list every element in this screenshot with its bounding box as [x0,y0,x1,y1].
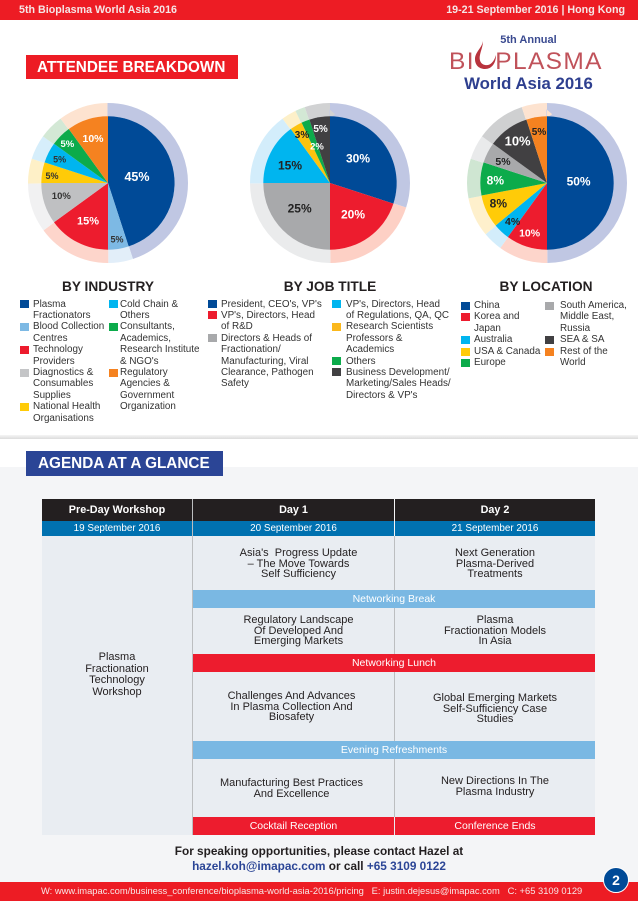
legend: by job title: Manufacturing, Viral [221,356,309,367]
date: 20 september [193,521,394,536]
pie chart: by job title: 25% [287,202,312,216]
legend: by location [461,300,627,368]
header: day 1: Day 1 [279,504,308,516]
pie chart: by job title: 15% [278,159,302,173]
footer bar [0,882,638,901]
heading: attendee breakdown: ATTENDEE BREAKDOWN [37,59,225,76]
legend: by industry [20,298,199,424]
pie chart: by industry: 45% [124,170,149,184]
heading: agenda at a glance [26,451,223,476]
day 2 session 2: Fractionation Models [444,625,546,637]
legend: by industry: Diagnostics & [33,367,93,378]
day 2 session 4: New Directions In The [441,775,549,787]
legend: by job title: VP's, Directors, Head [346,298,440,310]
date: 21 september [395,521,595,536]
table body background [42,536,595,835]
day 2 session 4 [441,775,549,798]
legend: by location: Japan [474,323,501,334]
legend: by location: Middle East, [560,311,614,322]
day 2 session 1 [455,547,535,580]
workshop cell: Plasma [99,651,135,663]
legend: by industry: Blood Collection [33,321,104,332]
day 1 session 1: – The Move Towards [248,558,349,570]
day 1 session 3: In Plasma Collection And [230,701,353,713]
header right text: 19-21 September 2016 | Hong Kong [446,4,625,16]
legend: by job title [208,298,451,401]
pie chart: by job title: 30% [346,152,370,166]
pie chart: by job title [250,103,410,263]
legend: by industry: Organisations [33,413,94,424]
networking break: Networking Break [353,593,435,605]
day 2 session 2: Plasma [477,614,513,626]
logo: bioplasma wordmark: BIOPLASMA [449,48,603,75]
pie chart: by location: 8% [486,174,504,188]
date: 21 september: 21 September 2016 [452,523,538,534]
legend: by industry: Research Institute [120,344,199,355]
pie chart: by location: 10% [519,228,540,240]
legend: by industry: & NGO's [120,356,159,367]
legend: by location: USA & Canada [474,346,540,357]
legend: by location: Korea and [474,311,520,322]
legend: by industry: Fractionators [33,310,91,321]
column line [394,536,395,817]
legend: by job title: VP's, Directors, Head [221,310,315,321]
agenda background panel [0,467,638,883]
workshop cell: Fractionation [85,663,149,675]
contact text: For speaking opportunities, please contact Hazel at [175,844,463,858]
legend: by job title: President, CEO's, VP's [221,298,322,310]
logo: 5th annual: 5th Annual [500,34,557,46]
legend: by job title: Safety [221,378,249,389]
workshop cell: Technology [89,674,145,686]
pie chart: by location: 5% [495,156,511,168]
header: pre-day workshop [42,499,192,521]
pie chart: by job title: 3% [294,130,309,141]
day 2 session 3: Studies [477,713,513,725]
pie chart: by industry: 5% [110,235,123,245]
day 2 session 1: Plasma-Derived [456,558,534,570]
evening refreshments [193,741,595,759]
day 2 session 1: Next Generation [455,547,535,559]
networking lunch: Networking Lunch [352,657,436,669]
conference ends [395,817,595,835]
legend: by industry: Organization [120,401,176,412]
legend: by industry: Consultants, [120,321,175,332]
logo [449,34,603,93]
legend: by job title: Professors & [346,333,402,344]
pie chart: by job title: 5% [313,124,328,135]
header bar [0,0,638,20]
legend: by job title: Research Scientists [346,321,433,332]
heading: attendee breakdown [26,55,238,79]
workshop cell [85,651,149,698]
date: 20 september: 20 September 2016 [250,523,337,534]
contact text: hazel.koh@imapac.com or call +65 3109 0122 [192,859,446,873]
logo: drop icon [475,41,496,69]
day 1 session 4 [220,777,363,800]
header: pre-day workshop: Pre-Day Workshop [69,504,165,516]
pie chart: by location: 50% [566,175,591,189]
day 1 session 2 [243,614,354,647]
day 2 session 2: In Asia [478,635,512,647]
date: 19 september [42,521,192,536]
legend: by location: South America, [560,300,627,311]
legend: by job title: Others [346,356,376,367]
pie chart: by job title: 20% [341,208,365,222]
networking break [193,590,595,608]
section divider [0,435,638,439]
day 2 session 4: Plasma Industry [456,786,534,798]
day 1 session 3 [228,690,355,723]
chart title: by industry: BY INDUSTRY [62,279,154,294]
legend: by location: Europe [474,357,506,368]
footer text: W: www.imapac.com/business_conference/bioplasma-world-asia-2016/pricing E: justin.dejesus@imapac.com C: +65 3109 0129 [41,886,582,896]
day 1 session 1: Asia's Progress Update [240,547,357,559]
networking lunch [193,654,595,672]
pie chart: by industry: 5% [53,155,66,165]
workshop cell: Workshop [92,686,142,698]
legend: by industry: Centres [33,333,68,344]
day 1 session 2: Emerging Markets [254,635,343,647]
legend: by industry: Academics, [120,333,171,344]
cocktail reception [193,817,394,835]
legend: by industry: Others [120,310,150,321]
header: day 2: Day 2 [481,504,509,516]
legend: by job title: of Regulations, QA, QC [346,310,449,321]
legend: by industry: Regulatory [120,367,168,378]
legend: by location: China [474,300,500,311]
legend: by location: Australia [474,334,512,345]
day 2 session 3 [433,692,557,725]
legend: by job title: Business Development/ [346,367,450,378]
pie chart: by job title: 2% [310,142,324,153]
contact text [175,844,464,873]
legend: by industry: Cold Chain & [120,298,178,310]
legend: by industry: Consumables [33,378,93,389]
legend: by location: Russia [560,323,590,334]
page number badge: 2 [612,872,620,888]
pie chart: by industry [28,103,188,263]
day 1 session 1 [240,547,357,580]
legend: by job title: Directors & Heads of [221,333,312,344]
header: day 1 [193,499,394,521]
day 2 session 1: Treatments [467,568,523,580]
day 1 session 2: Of Developed And [254,625,343,637]
legend: by job title: Fractionation/ [221,344,281,355]
evening refreshments: Evening Refreshments [341,744,447,756]
pie chart: by location: 5% [531,127,546,138]
legend: by industry: Supplies [33,390,71,401]
legend: by job title: of R&D [221,321,253,332]
legend: by location: SEA & SA [560,334,604,345]
header: day 2 [395,499,595,521]
day 2 session 3: Global Emerging Markets [433,692,557,704]
day 2 session 3: Self-Sufficiency Case [443,703,547,715]
legend: by job title: Marketing/Sales Heads/ [346,378,451,389]
pie chart: by location: 10% [504,134,531,149]
day 1 session 4: Manufacturing Best Practices [220,777,363,789]
conference ends: Conference Ends [454,820,536,832]
heading: agenda at a glance: AGENDA AT A GLANCE [38,455,210,472]
pie chart: by industry: 10% [82,133,104,145]
day 2 session 2 [444,614,546,647]
pie chart: by industry: 10% [51,191,71,202]
legend: by industry: Providers [33,356,75,367]
legend: by location: World [560,357,586,368]
legend: by industry: Agencies & [120,378,170,389]
day 1 session 3: Biosafety [269,711,314,723]
chart title: by location: BY LOCATION [499,279,593,294]
date: 19 september: 19 September 2016 [74,523,160,534]
legend: by industry: Technology [33,344,83,355]
pie chart: by location: 4% [505,216,521,228]
legend: by location: Rest of the [560,346,608,357]
day 1 session 3: Challenges And Advances [228,690,355,702]
chart title: by job title: BY JOB TITLE [284,279,376,294]
pie chart: by industry: 15% [77,216,99,228]
cocktail reception: Cocktail Reception [250,820,337,832]
legend: by job title: Clearance, Pathogen [221,367,314,378]
logo: world asia 2016: World Asia 2016 [464,74,593,93]
pie chart: by location: 8% [489,197,507,211]
column line [192,499,193,835]
legend: by industry: Government [120,390,174,401]
legend: by industry: National Health [33,401,100,412]
pie chart: by industry: 5% [60,139,74,150]
header left text: 5th Bioplasma World Asia 2016 [19,4,177,16]
day 1 session 4: And Excellence [254,788,329,800]
legend: by job title: Directors & VP's [346,390,417,401]
legend: by industry: Plasma [33,298,66,310]
day 1 session 2: Regulatory Landscape [243,614,354,626]
legend: by job title: Academics [346,344,394,355]
page number badge [603,867,629,893]
pie chart: by location [467,103,627,263]
pie chart: by industry: 5% [45,171,58,181]
day 1 session 1: Self Sufficiency [261,568,336,580]
